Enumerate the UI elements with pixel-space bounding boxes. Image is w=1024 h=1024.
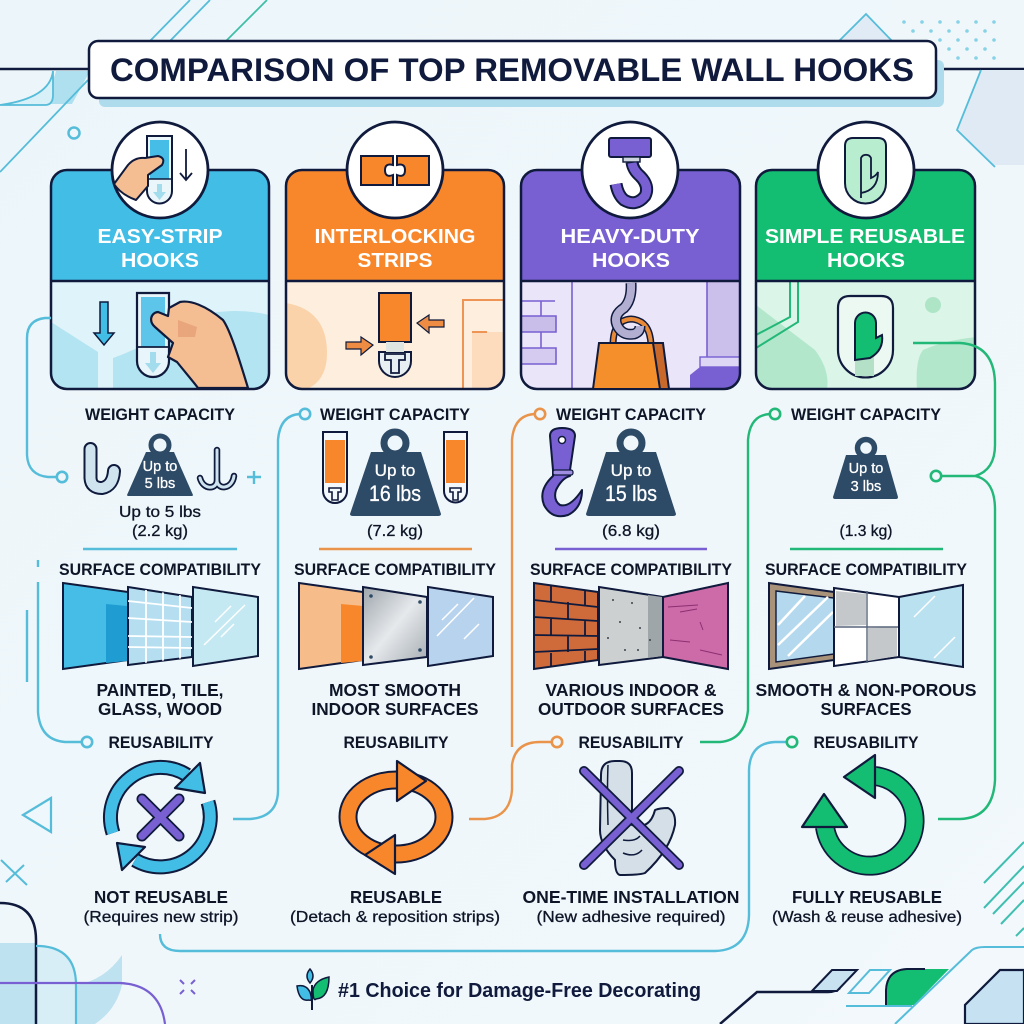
heading: STRIPS bbox=[358, 250, 432, 272]
icon: hook holding orange weight bbox=[593, 283, 669, 389]
icon: left J hook bbox=[90, 449, 114, 488]
icon: weight 5 lbs bbox=[127, 436, 193, 496]
connector lines bbox=[27, 318, 995, 951]
status text: NOT REUSABLE bbox=[94, 887, 228, 907]
status text: (Wash & reuse adhesive) bbox=[772, 909, 962, 926]
status text: (Detach & reposition strips) bbox=[290, 909, 500, 926]
surface: painted bbox=[63, 583, 128, 669]
column 3: surface compatibility bbox=[530, 561, 732, 719]
status text: REUSABLE bbox=[350, 887, 442, 907]
icon: not reusable arrows bbox=[111, 763, 210, 870]
column 3: weight capacity: WEIGHT CAPACITY bbox=[556, 406, 706, 424]
icon: weight 3 lbs bbox=[833, 440, 898, 499]
icon: fully reusable arrow bbox=[802, 755, 915, 866]
title banner: COMPARISON OF TOP REMOVABLE WALL HOOKS bbox=[110, 52, 914, 88]
column 2: reusability bbox=[290, 734, 500, 926]
surface: tile bbox=[128, 587, 192, 665]
column 1: weight capacity bbox=[85, 406, 261, 540]
surface label: SMOOTH & NON-POROUS bbox=[756, 680, 976, 700]
heading bbox=[98, 226, 222, 272]
surface: glass bbox=[428, 587, 493, 666]
icon: weight 15 lbs: 15 lbs bbox=[605, 481, 657, 506]
icon: one-time hook crossed out bbox=[584, 761, 679, 875]
surface: white tile bbox=[834, 588, 899, 666]
status text: (New adhesive required) bbox=[536, 909, 726, 926]
icon: right double hook bbox=[200, 450, 234, 487]
column dividers bbox=[83, 548, 943, 550]
heading: HEAVY-DUTY bbox=[560, 226, 700, 248]
column 2: surface compatibility bbox=[294, 561, 496, 719]
heading bbox=[560, 226, 700, 272]
decorative corner shapes: top left bbox=[0, 0, 267, 172]
icon: down arrow bbox=[94, 302, 114, 345]
icon: weight 16 lbs: Up to bbox=[375, 461, 415, 480]
surface label bbox=[312, 680, 478, 719]
status text: ONE-TIME INSTALLATION bbox=[522, 887, 740, 907]
surface label: PAINTED, TILE, bbox=[96, 680, 224, 700]
status text: (Requires new strip) bbox=[84, 909, 238, 926]
column 1: weight capacity: WEIGHT CAPACITY bbox=[85, 406, 235, 424]
icon: weight 15 lbs bbox=[586, 432, 676, 516]
panel: heavy-duty card bbox=[521, 122, 742, 389]
column 4: reusability bbox=[772, 734, 962, 926]
column 2: weight capacity bbox=[320, 406, 470, 540]
surface label: MOST SMOOTH bbox=[329, 680, 461, 700]
capacity value: (6.8 kg) bbox=[602, 523, 660, 540]
icon: weight 16 lbs: 16 lbs bbox=[369, 481, 421, 506]
heading: EASY-STRIP bbox=[98, 226, 222, 248]
capacity value: (2.2 kg) bbox=[132, 523, 188, 540]
decorative corner shapes: bottom left bbox=[0, 798, 195, 1024]
decorative corner shapes: top right bbox=[838, 14, 1024, 167]
heading: SIMPLE REUSABLE bbox=[765, 226, 965, 248]
column 3: surface compatibility: SURFACE COMPATIBILITY bbox=[530, 561, 732, 579]
column 4: surface compatibility bbox=[756, 561, 976, 719]
icon: purple crane hook bbox=[542, 428, 582, 516]
surface: painted orange bbox=[299, 583, 363, 669]
surface label bbox=[538, 680, 724, 719]
icon: left strip bbox=[323, 432, 347, 503]
icon: weight 16 lbs bbox=[350, 432, 441, 516]
surface label bbox=[756, 680, 976, 719]
icon: round badge puzzle bbox=[347, 122, 443, 218]
footer: #1 Choice for Damage-Free Decorating bbox=[338, 979, 701, 1002]
column 2: weight capacity: WEIGHT CAPACITY bbox=[320, 406, 470, 424]
heading bbox=[314, 226, 476, 272]
heading: HOOKS bbox=[592, 250, 670, 272]
column 1: reusability: REUSABILITY bbox=[108, 734, 214, 752]
column 4: weight capacity: WEIGHT CAPACITY bbox=[791, 406, 941, 424]
column 3: reusability: REUSABILITY bbox=[578, 734, 684, 752]
icon: round badge easy-strip bbox=[112, 122, 208, 218]
icon: plus bbox=[247, 471, 261, 484]
column 4: surface compatibility: SURFACE COMPATIBILITY bbox=[765, 561, 967, 579]
surface label: OUTDOOR SURFACES bbox=[538, 699, 724, 719]
icon: inward arrows bbox=[346, 315, 444, 355]
column 3: reusability bbox=[522, 734, 740, 926]
capacity value: Up to 5 lbs bbox=[119, 504, 201, 521]
title banner bbox=[89, 41, 944, 107]
icon: weight 3 lbs: Up to bbox=[849, 461, 883, 477]
capacity value bbox=[119, 504, 201, 540]
surface: brick bbox=[534, 583, 598, 669]
surface: glass bbox=[193, 587, 258, 666]
column 1: reusability bbox=[84, 734, 238, 926]
column 2: reusability: REUSABILITY bbox=[344, 734, 448, 752]
icon: round badge adhesive hook bbox=[818, 122, 914, 218]
icon: reusable loop bbox=[348, 761, 444, 874]
heading: HOOKS bbox=[827, 250, 905, 272]
surface: concrete bbox=[599, 587, 663, 665]
surface label: SURFACES bbox=[820, 699, 912, 719]
column 3: weight capacity bbox=[542, 406, 706, 540]
icon: weight 5 lbs: Up to bbox=[143, 459, 177, 475]
icon: interlocking hook strip bbox=[379, 293, 411, 377]
surface label: INDOOR SURFACES bbox=[312, 699, 478, 719]
surface: window bbox=[769, 583, 834, 669]
panel: easy-strip card bbox=[51, 122, 269, 389]
status text bbox=[772, 887, 962, 926]
column 4: reusability: REUSABILITY bbox=[814, 734, 918, 752]
surface label: VARIOUS INDOOR & bbox=[546, 680, 717, 700]
icon: right strip bbox=[444, 432, 467, 502]
column 2: surface compatibility: SURFACE COMPATIBILITY bbox=[294, 561, 496, 579]
status text bbox=[290, 887, 500, 926]
status text bbox=[522, 887, 740, 926]
heading: HOOKS bbox=[121, 250, 199, 272]
icon: round badge crane hook bbox=[582, 122, 678, 218]
capacity value: (1.3 kg) bbox=[840, 523, 892, 540]
icon: strip and hand bbox=[137, 293, 248, 388]
status text: FULLY REUSABLE bbox=[792, 887, 942, 907]
heading: INTERLOCKING bbox=[314, 226, 476, 248]
icon: weight 15 lbs: Up to bbox=[611, 461, 651, 480]
panel: simple reusable card bbox=[756, 122, 977, 389]
column 1: surface compatibility: SURFACE COMPATIBILITY bbox=[59, 561, 261, 579]
footer bbox=[297, 969, 701, 1010]
panel: interlocking card bbox=[286, 122, 512, 392]
column 4: weight capacity bbox=[791, 406, 941, 540]
icon: sprout bbox=[297, 969, 329, 1010]
surface: metal bbox=[363, 587, 427, 665]
icon: weight 3 lbs: 3 lbs bbox=[851, 479, 881, 495]
heading bbox=[765, 226, 965, 272]
icon: reusable hook plate bbox=[838, 296, 893, 377]
icon: weight 5 lbs: 5 lbs bbox=[145, 476, 175, 492]
status text bbox=[84, 887, 238, 926]
column 1: surface compatibility bbox=[59, 561, 261, 719]
surface: painted plaster bbox=[663, 583, 728, 669]
surface label: GLASS, WOOD bbox=[98, 699, 222, 719]
surface: glass panel bbox=[899, 585, 963, 667]
surface label bbox=[96, 680, 224, 719]
decorative corner shapes: bottom right bbox=[720, 842, 1024, 1024]
capacity value: (7.2 kg) bbox=[367, 523, 423, 540]
